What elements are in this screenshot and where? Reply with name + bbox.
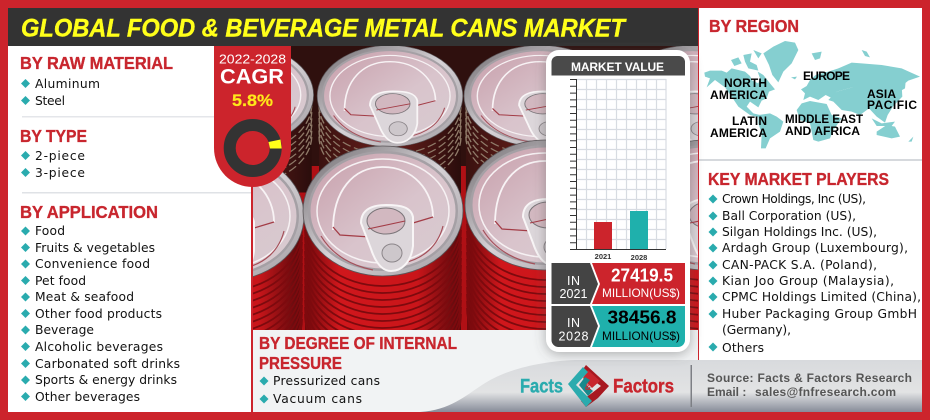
list: application: Sports & energy drinks [35,373,177,387]
CAGR label: CAGR [220,66,284,88]
source text: Source: Facts & Factors Research [707,371,912,385]
value row 2021: IN [567,274,580,288]
list: players: CPMC Holdings Limited (China), [722,290,921,304]
footer band [420,360,922,412]
bar 2028 [630,211,648,249]
logo: Facts & Factors [520,365,674,407]
region labels [710,69,917,140]
value row 2028: IN [567,316,580,330]
list: players: Huber Packaging Group GmbH [722,307,917,321]
value row 2021 [552,263,685,304]
value row 2028: 38456.8 [608,308,676,328]
heading: key market players: KEY MARKET PLAYERS [708,169,889,189]
CAGR years: 2022-2028 [219,52,286,66]
list: players: Silgan Holdings Inc. (US), [722,225,877,239]
value row 2021: MILLION(US$) [602,286,680,300]
panel: by degree of internal pressure: PRESSURE [259,353,342,373]
list: application: Other food products [35,307,162,321]
market value card: MARKET VALUE [571,60,664,74]
list: application: Food [35,224,65,238]
card header [552,56,685,76]
region labels: NORTH [724,76,767,90]
region labels: AMERICA [710,88,767,102]
list: players [708,192,921,355]
list: pressure: Pressurized cans [273,374,380,388]
logo: Facts & Factors: & [585,382,592,392]
list: type: 2-piece [35,149,85,163]
region labels: ASIA [867,87,896,101]
title: GLOBAL FOOD & BEVERAGE METAL CANS MARKET [21,14,628,42]
region labels: MIDDLE EAST [785,112,864,126]
panel: by degree of internal pressure [253,330,698,412]
heading: by type: BY TYPE [20,126,87,146]
list: players: Crown Holdings, Inc (US), [722,192,866,206]
list: players: Ball Corporation (US), [722,209,856,223]
photo: red metal cans [253,46,698,330]
list: players: Ardagh Group (Luxembourg), [722,241,908,255]
bar chart [574,79,666,262]
bar chart: 2021 [595,252,611,261]
heading: by application: BY APPLICATION [20,202,158,222]
list: pressure: Vacuum cans [273,392,362,406]
value row 2028: 2028 [558,330,589,344]
list: application [21,224,180,404]
source text: sales@fnfresearch.com [755,385,896,399]
region labels: AND AFRICA [785,124,860,138]
panel: key market players [699,159,922,360]
header bar [8,8,698,46]
panel: left segments [8,46,253,412]
list: application: Other beverages [35,390,140,404]
source text [707,371,912,399]
logo: Facts & Factors: Facts [520,376,563,398]
logo: Facts & Factors: Factors [613,376,674,398]
list: application: Pet food [35,274,86,288]
list: application: Alcoholic beverages [35,340,163,354]
list: type [21,149,85,180]
bar 2021 [594,222,612,249]
donut gauge [230,125,282,171]
source text: Email : [707,385,746,399]
region labels: LATIN [732,114,767,128]
heading: pressure: BY DEGREE OF INTERNAL [259,333,457,353]
value row 2028: MILLION(US$) [602,329,680,343]
list: application: Fruits & vegetables [35,241,155,255]
world map [704,41,920,148]
list: type: 3-piece [35,166,85,180]
market value card [546,50,690,352]
heading: by raw material: BY RAW MATERIAL [20,53,173,73]
list: application: Beverage [35,323,94,337]
heading: by region: BY REGION [709,16,799,36]
list: application: Convenience food [35,257,150,271]
list: raw material: Steel [35,94,65,108]
value row 2028 [551,306,685,347]
list: raw material [21,77,100,108]
panel: by region [699,8,922,159]
region labels: EUROPE [803,69,850,83]
list: players: Others [722,341,764,355]
list: application: Carbonated soft drinks [35,357,180,371]
list: players: CAN-PACK S.A. (Poland), [722,258,877,272]
list: pressure [260,374,380,406]
list: raw material: Aluminum [35,77,100,91]
list: players: (Germany), [722,323,791,337]
list: application: Meat & seafood [35,290,134,304]
region labels: AMERICA [710,126,767,140]
bar chart: 2028 [631,253,647,262]
value row 2021: 27419.5 [611,266,673,286]
region labels: PACIFIC [867,98,917,112]
CAGR badge [214,46,291,187]
list: players: Kian Joo Group (Malaysia), [722,274,894,288]
CAGR value: 5.8% [232,92,273,110]
value row 2021: 2021 [560,287,588,301]
